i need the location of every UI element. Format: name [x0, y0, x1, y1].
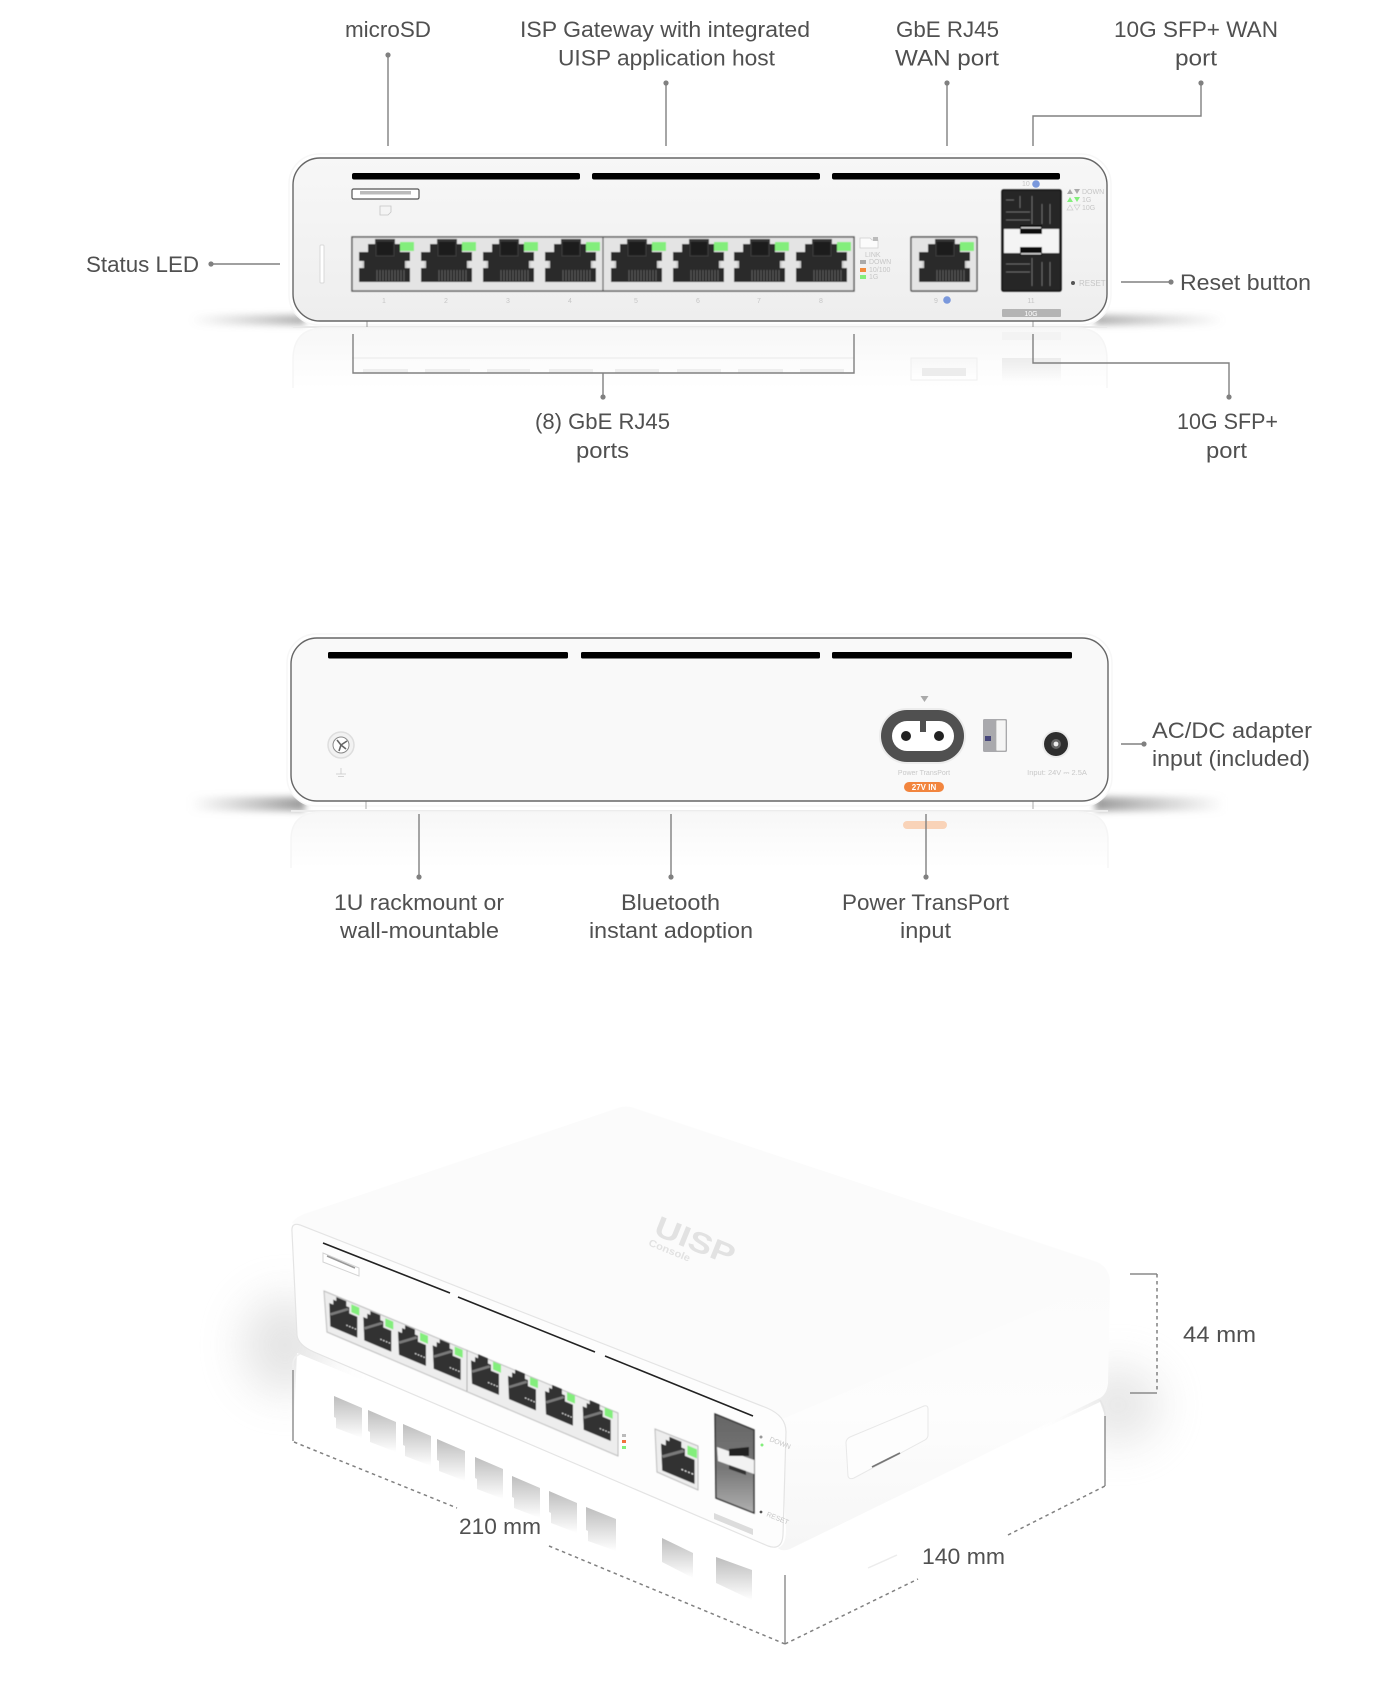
device side face [778, 1280, 1110, 1550]
SFP speed legend [1067, 189, 1104, 212]
10G badge: 3D [714, 1513, 753, 1535]
panel: rear view of the device [190, 634, 1312, 943]
port numbers: 8 [819, 298, 823, 305]
microSD slot [352, 189, 419, 215]
callout: ISP gateway: ISP Gateway with integrated [520, 17, 810, 42]
ventilation slots: front [352, 173, 1060, 180]
port numbers: 4 [568, 298, 572, 305]
reflected ports [334, 1396, 752, 1600]
dimension: 44 mm: 44 mm [1183, 1322, 1256, 1347]
callout: microSD: microSD [345, 17, 431, 42]
callout: 8 GbE RJ45 ports: ports [576, 438, 629, 463]
callout: Bluetooth: Bluetooth [621, 890, 720, 915]
icon: grounding screw [328, 732, 354, 776]
callout: Power TransPort input: input [900, 918, 951, 943]
link LED legend: DOWN [869, 259, 891, 266]
ventilation slots: rear [328, 652, 1072, 658]
lock switch [983, 719, 1007, 752]
SFP speed legend: DOWN [1082, 189, 1104, 196]
link LED legend: 10/100 [869, 267, 891, 274]
soft shadows around the device [243, 1297, 1160, 1443]
link LED legend: 3D [622, 1434, 626, 1449]
port numbers: 3 [506, 298, 510, 305]
SFP speed legend: 1G [1082, 197, 1091, 204]
Power TransPort socket: Power TransPort [898, 770, 950, 777]
WAN RJ45 port: 9 [934, 298, 938, 305]
SFP+ cages: 10 [1022, 181, 1030, 188]
link LED legend: 1G [869, 274, 878, 281]
callout: GbE RJ45 WAN port [895, 17, 999, 146]
side cover panel [846, 1406, 928, 1479]
10G badge: 10G [1024, 311, 1038, 318]
callout: microSD [345, 17, 431, 146]
port numbers: 5 [634, 298, 638, 305]
callout: AC/DC adapter input: input (included) [1152, 746, 1310, 771]
panel: 3D view with dimensions [243, 1106, 1256, 1644]
callout: rackmount: 1U rackmount or [334, 890, 504, 915]
SFP+ cages: 3D [715, 1414, 754, 1513]
callout: rackmount [334, 814, 504, 943]
ventilation slots: 3D [323, 1243, 753, 1416]
WAN RJ45 port: 3D [655, 1429, 698, 1490]
SFP speed legend: 10G [1082, 205, 1095, 212]
device body: rear [291, 638, 1108, 801]
UISP logo: UISP [650, 1211, 740, 1272]
27V IN badge: 27V IN [912, 783, 936, 792]
RJ45 port block: 3D [324, 1291, 618, 1456]
SFP legend: 3D: DOWN [768, 1436, 791, 1451]
callout: Power TransPort input [842, 814, 1009, 943]
callout: 10G SFP+ WAN port: port [1175, 46, 1217, 70]
callout: status LED [86, 252, 280, 277]
port numbers: 6 [696, 298, 700, 305]
device top face [292, 1106, 1110, 1425]
panel: front view of the device [86, 17, 1311, 463]
callout: 10G SFP+ port: 10G SFP+ [1177, 409, 1278, 434]
DC input jack: Input: 24V ⎓ 2.5A [1027, 768, 1087, 777]
callout: GbE RJ45 WAN port: WAN port [895, 46, 999, 70]
port numbers: 7 [757, 298, 761, 305]
callout: status LED: Status LED [86, 252, 199, 277]
callout: AC/DC adapter input: AC/DC adapter [1152, 718, 1312, 743]
status LED [320, 245, 324, 283]
callout: 10G SFP+ port [1033, 334, 1278, 463]
dimension: 140 mm [785, 1416, 1105, 1644]
callout: Power TransPort input: Power TransPort [842, 890, 1009, 915]
link LED legend [860, 237, 891, 281]
UISP logo [647, 1211, 740, 1280]
device front face [292, 1224, 786, 1547]
RJ45 port block [352, 237, 854, 291]
callout: AC/DC adapter input [1121, 718, 1312, 771]
callout: rackmount: wall-mountable [339, 918, 499, 943]
27V IN badge [904, 782, 944, 792]
floor shadow and reflection: front view [190, 154, 1225, 388]
SFP+ cages: 11 [1027, 298, 1035, 305]
callout: ISP gateway [520, 17, 810, 146]
microSD slot: 3D [323, 1253, 359, 1276]
callout: reset button: Reset button [1180, 270, 1311, 295]
SFP legend: 3D [760, 1436, 791, 1527]
reset pinhole: RESET [1079, 279, 1106, 288]
callout: Bluetooth: instant adoption [589, 918, 753, 943]
device body: front [293, 158, 1107, 321]
link LED legend: LINK [865, 252, 881, 259]
UISP logo: Console [647, 1238, 692, 1265]
SFP+ cages [1002, 180, 1061, 305]
callout: 8 GbE RJ45 ports: (8) GbE RJ45 [535, 409, 670, 434]
10G badge [1002, 309, 1061, 318]
callout: 10G SFP+ port: port [1206, 438, 1247, 463]
callout: ISP gateway: UISP application host [558, 46, 775, 70]
port numbers: 1 [382, 298, 386, 305]
SFP legend: 3D: RESET [765, 1511, 790, 1527]
WAN RJ45 port [911, 237, 977, 305]
port numbers: 2 [444, 298, 448, 305]
callout: reset button [1121, 270, 1311, 295]
callout: GbE RJ45 WAN port: GbE RJ45 [896, 17, 999, 42]
callout: 10G SFP+ WAN port: 10G SFP+ WAN [1114, 17, 1278, 42]
port numbers [382, 298, 823, 305]
dimension: 210 mm: 210 mm [459, 1514, 541, 1539]
callout: 10G SFP+ WAN port [1033, 17, 1278, 146]
dimension: 44 mm [1130, 1274, 1256, 1393]
Power TransPort socket [879, 696, 966, 777]
DC input jack [1027, 730, 1087, 777]
callout: Bluetooth [589, 814, 753, 943]
dimension: 140 mm: 140 mm [922, 1544, 1005, 1569]
floor reflection of device [293, 1353, 1105, 1644]
dimension: 210 mm [293, 1370, 785, 1644]
floor shadow and reflection: rear view [190, 634, 1225, 868]
callout: 8 GbE RJ45 ports [353, 334, 854, 463]
